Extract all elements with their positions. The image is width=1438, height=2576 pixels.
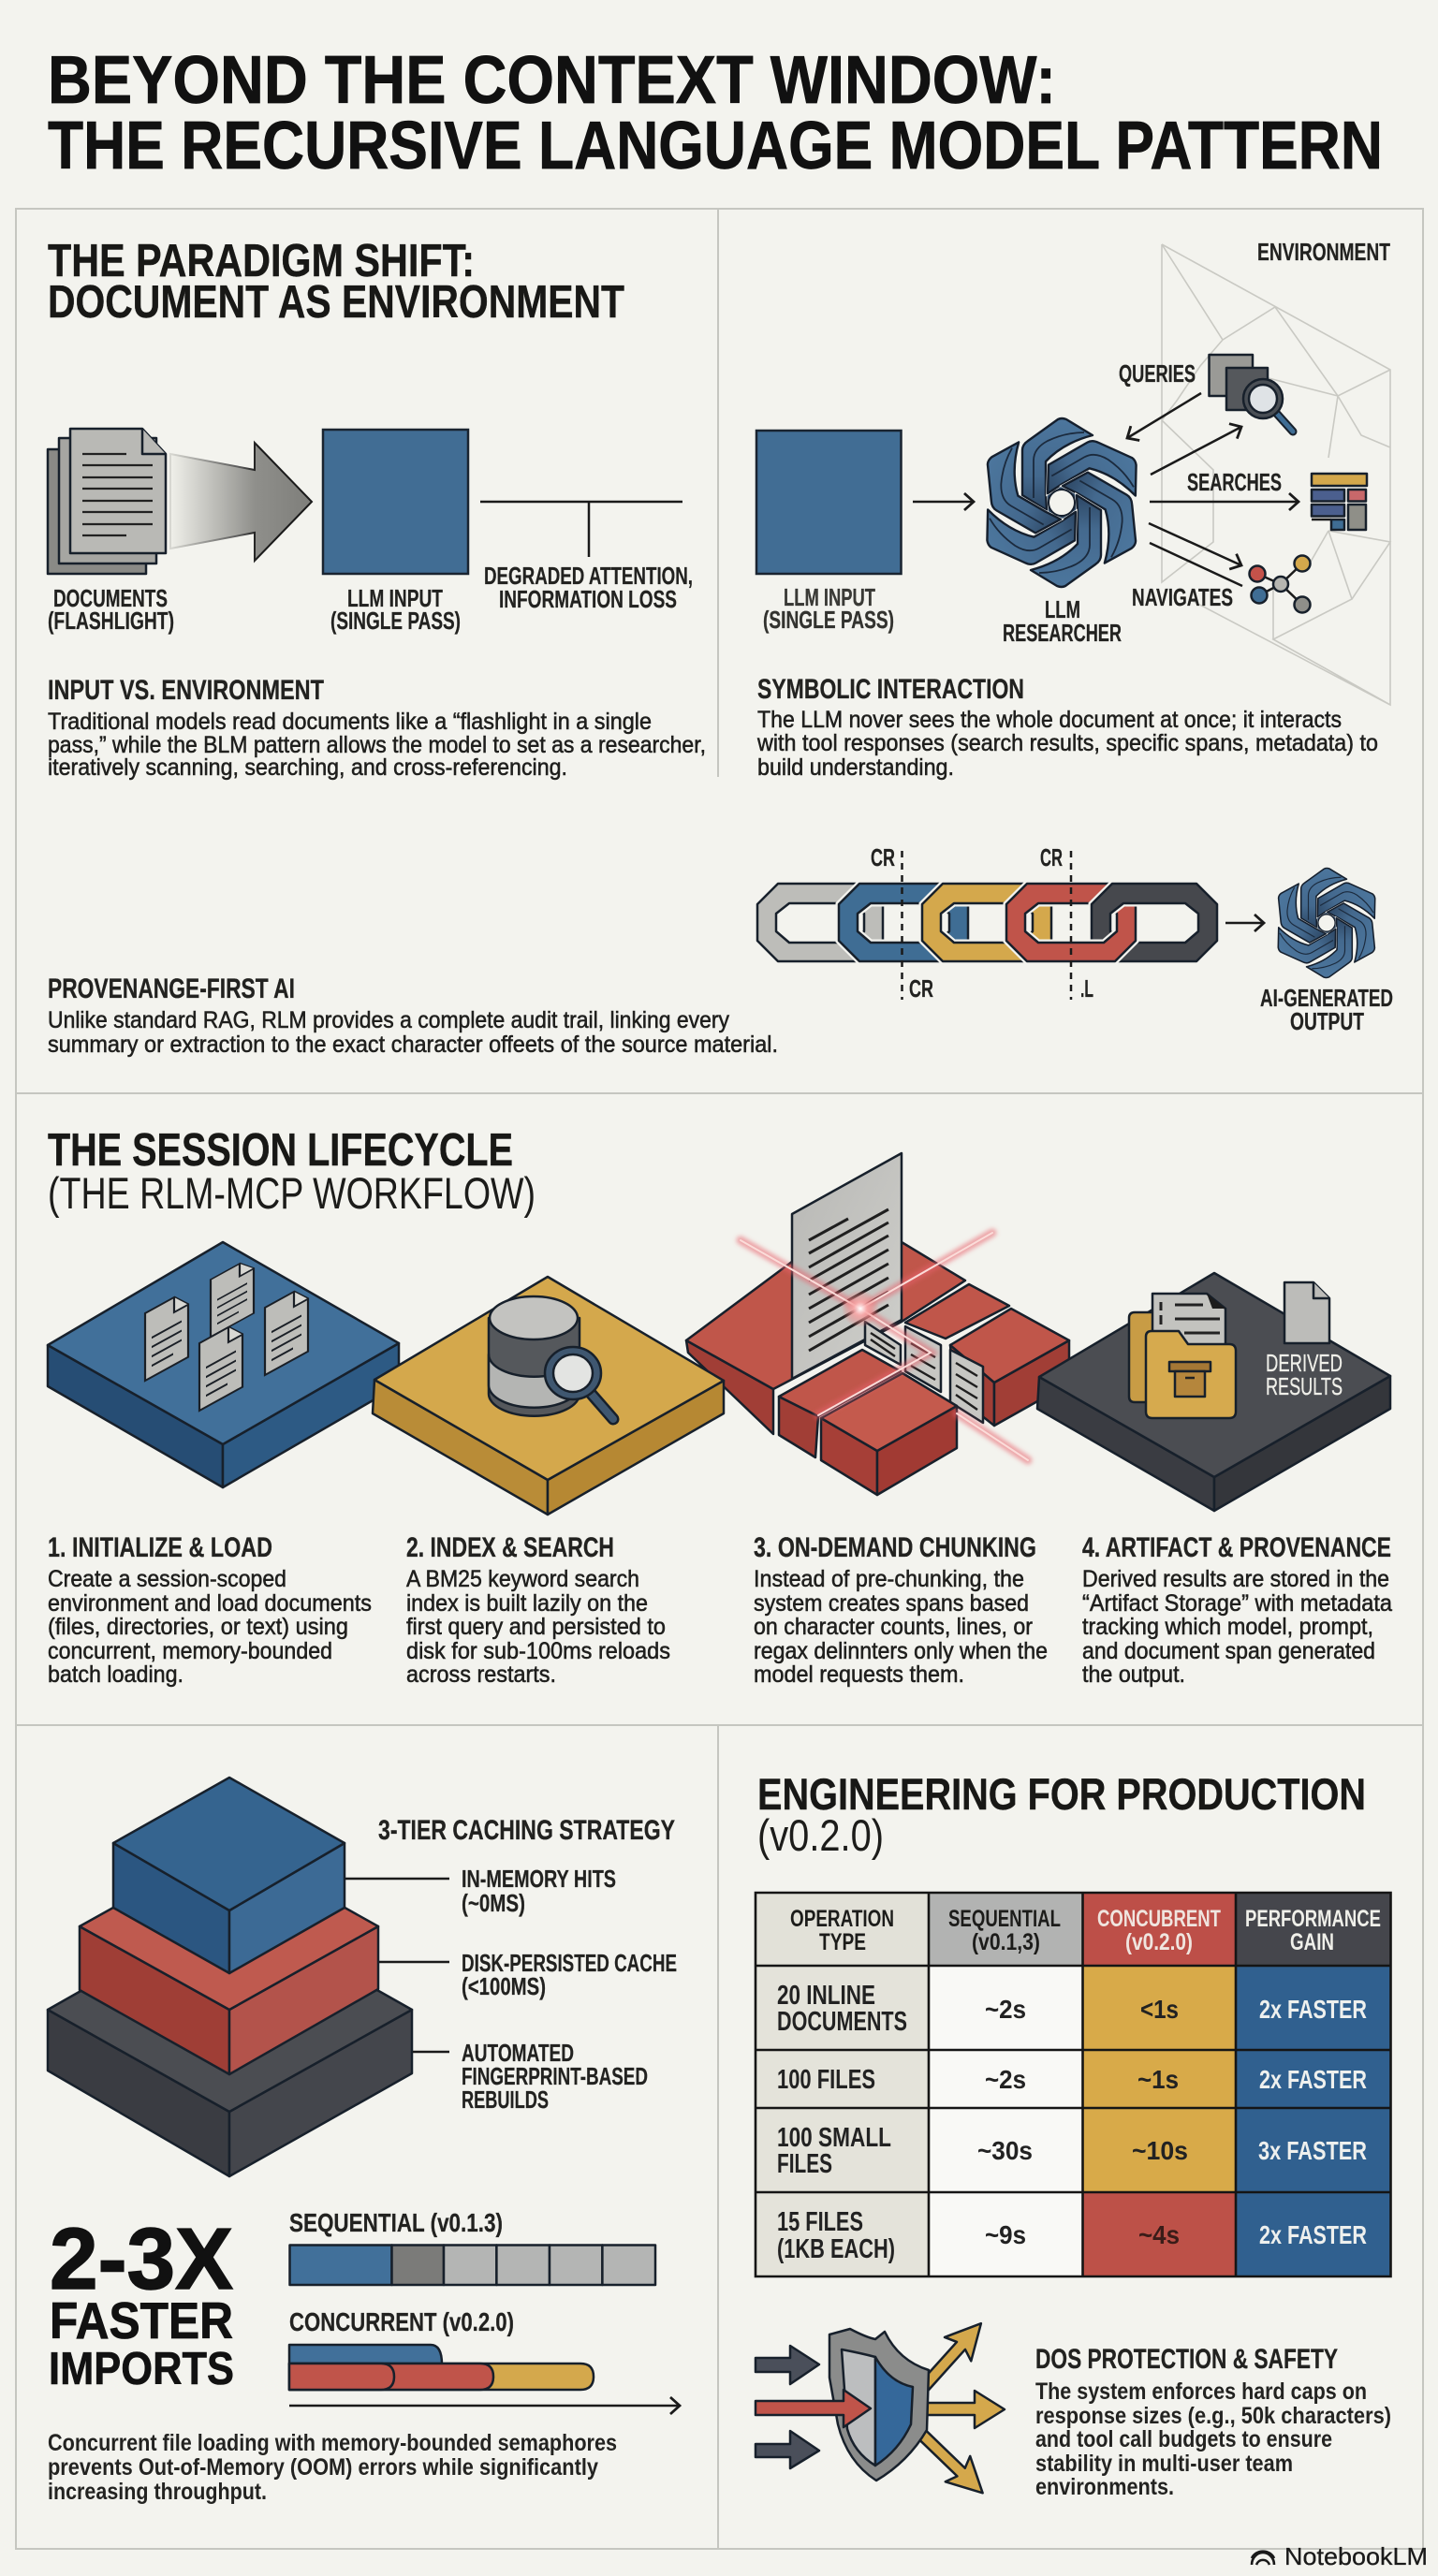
chart: 3-tier caching stack bbox=[48, 1778, 412, 2176]
table header: OPERATION bbox=[790, 1906, 894, 1932]
table row: 20 inline documents: DOCUMENTS bbox=[777, 2007, 907, 2037]
step 3 text: 3. ON-DEMAND CHUNKING bbox=[754, 1532, 1036, 1563]
block: middle bbox=[905, 1284, 1009, 1339]
text block: concurrent loading: Concurrent file loading with memory-bounded semaphores bbox=[48, 2430, 617, 2456]
arrow: flashlight beam bbox=[170, 443, 312, 561]
performance table bbox=[756, 1893, 1391, 2276]
text block: input vs environment: Traditional models read documents like a “flashlight in a single bbox=[48, 709, 652, 735]
icon: magnifier bbox=[545, 1347, 613, 1419]
step 2 text: index is built lazily on the bbox=[406, 1590, 648, 1617]
table row: 20 inline documents: ~2s bbox=[985, 1995, 1026, 2024]
platform 3: red chunks with document bbox=[686, 1153, 1069, 1495]
icon: LLM input block bbox=[323, 430, 468, 574]
panel: engineering for production bbox=[718, 1725, 1423, 2549]
arrows: deflected bbox=[907, 2311, 1005, 2506]
table row: 20 inline documents: 20 INLINE bbox=[777, 1981, 875, 2011]
arrow: blocked red bbox=[756, 2390, 871, 2427]
chart: concurrent bars bbox=[289, 2307, 594, 2390]
label: navigates: NAVIGATES bbox=[1132, 583, 1233, 611]
icon: search results table bbox=[1312, 474, 1367, 530]
text block: provenance-first AI: Unlike standard RAG, RLM provides a complete audit trail, linking every bbox=[48, 1007, 729, 1033]
step 2 text: first query and persisted to bbox=[406, 1614, 666, 1640]
arrow: chain to output bbox=[1225, 922, 1264, 924]
table row: 100 files: 100 FILES bbox=[777, 2065, 875, 2095]
text block: input vs environment bbox=[48, 675, 706, 781]
label: LLM input bbox=[330, 584, 461, 635]
label: documents: DOCUMENTS bbox=[53, 584, 168, 612]
table row: 100 small files: 100 SMALL bbox=[777, 2123, 891, 2153]
table row: 15 files: 2x FASTER bbox=[1259, 2220, 1367, 2249]
chart: sequential bar: SEQUENTIAL (v0.1.3) bbox=[289, 2208, 503, 2237]
table row: 20 inline documents: <1s bbox=[1140, 1995, 1179, 2024]
table row: 15 files: ~4s bbox=[1138, 2220, 1180, 2249]
callout: disk-persisted cache bbox=[379, 1949, 677, 2000]
text block: symbolic interaction bbox=[756, 674, 1378, 781]
step 4 text bbox=[1082, 1532, 1392, 1688]
callout: 2-3x faster imports bbox=[49, 2210, 234, 2394]
diagram: degraded attention line bbox=[480, 502, 682, 557]
step 1 text: concurrent, memory-bounded bbox=[48, 1638, 332, 1664]
label: environment: ENVIRONMENT bbox=[1257, 238, 1390, 266]
text block: input vs environment: INPUT VS. ENVIRONMENT bbox=[48, 675, 324, 706]
label: documents: (FLASHLIGHT) bbox=[48, 607, 174, 635]
text block: DoS protection: and tool call budgets to ensure bbox=[1035, 2426, 1332, 2452]
step 1 text: Create a session-scoped bbox=[48, 1566, 286, 1592]
table row: 20 inline documents bbox=[756, 1966, 1391, 2050]
block: front small bbox=[779, 1350, 901, 1457]
table row: 100 files: ~2s bbox=[985, 2065, 1026, 2094]
block: front large bbox=[821, 1373, 957, 1495]
text block: DoS protection: response sizes (e.g., 50k characters) bbox=[1035, 2403, 1391, 2429]
label: LLM researcher: LLM bbox=[1045, 595, 1080, 623]
heading: caching strategy: 3-TIER CACHING STRATEGY bbox=[378, 1815, 675, 1846]
table header bbox=[756, 1893, 1391, 1966]
table row: 100 small files: FILES bbox=[777, 2149, 832, 2179]
label: LLM researcher bbox=[1003, 595, 1122, 647]
callout: fingerprint rebuilds: FINGERPRINT-BASED bbox=[462, 2062, 648, 2090]
step 1 text: batch loading. bbox=[48, 1661, 183, 1688]
table row: 100 small files: ~10s bbox=[1132, 2136, 1188, 2165]
text block: symbolic interaction: The LLM nover sees the whole document at once; it interacts bbox=[757, 707, 1342, 733]
diagram: environment mesh bbox=[1162, 238, 1390, 705]
label: LLM input faded bbox=[763, 583, 894, 634]
text block: input vs environment: iteratively scanning, searching, and cross-referencing. bbox=[48, 754, 567, 781]
shield bbox=[829, 2329, 929, 2481]
table row: 100 small files: ~30s bbox=[977, 2136, 1033, 2165]
step 4 text: tracking which model, prompt, bbox=[1082, 1614, 1373, 1640]
label: chain markers: CR bbox=[871, 843, 895, 871]
step 2 text bbox=[406, 1532, 670, 1688]
heading: paradigm shift: DOCUMENT AS ENVIRONMENT bbox=[48, 277, 624, 328]
laser cut lines bbox=[741, 1233, 1028, 1460]
table row: 100 small files: 3x FASTER bbox=[1258, 2136, 1367, 2165]
icon: query documents and magnifier bbox=[1210, 355, 1293, 432]
label: derived results: RESULTS bbox=[1266, 1372, 1343, 1400]
label: degraded attention: DEGRADED ATTENTION, bbox=[484, 562, 693, 590]
platform 1: blue documents bbox=[48, 1242, 399, 1487]
table row: 15 files: (1KB EACH) bbox=[777, 2234, 895, 2264]
panel: session lifecycle bbox=[16, 1093, 1423, 1725]
table row: 15 files bbox=[756, 2192, 1391, 2276]
label: derived results: DERIVED bbox=[1266, 1349, 1343, 1377]
callout: fingerprint rebuilds: REBUILDS bbox=[462, 2086, 549, 2114]
icon: output knot bbox=[1267, 869, 1387, 977]
step 3 text bbox=[754, 1532, 1048, 1688]
label: derived results bbox=[1266, 1349, 1343, 1400]
label: queries: QUERIES bbox=[1119, 359, 1196, 388]
heading: engineering for production: (v0.2.0) bbox=[757, 1810, 884, 1860]
text block: DoS protection: DOS PROTECTION & SAFETY bbox=[1035, 2344, 1338, 2375]
heading: paradigm shift bbox=[48, 236, 624, 328]
title bbox=[48, 43, 1383, 183]
label: chain markers: .L bbox=[1080, 974, 1093, 1003]
arrow: time axis bbox=[289, 2405, 680, 2407]
heading: session lifecycle bbox=[48, 1125, 536, 1218]
table row: 15 files: 15 FILES bbox=[777, 2207, 863, 2237]
table header: TYPE bbox=[819, 1929, 866, 1955]
panel: caching and imports bbox=[16, 1725, 718, 2549]
text block: symbolic interaction: build understanding. bbox=[757, 754, 954, 781]
icon: shield with deflected arrows bbox=[756, 2311, 1005, 2506]
step 3 text: regax delinnters only when the bbox=[754, 1638, 1048, 1664]
step 2 text: across restarts. bbox=[406, 1661, 556, 1688]
text block: concurrent loading bbox=[48, 2430, 617, 2505]
icon: derived document bbox=[1284, 1282, 1329, 1343]
icon: LLM researcher knot bbox=[969, 418, 1154, 587]
table header: (v0.2.0) bbox=[1125, 1929, 1193, 1955]
table row: 20 inline documents: 2x FASTER bbox=[1259, 1995, 1367, 2024]
icon: folder with checklist bbox=[1129, 1294, 1236, 1418]
label: AI-generated output bbox=[1260, 984, 1393, 1035]
block: back left bbox=[686, 1242, 965, 1434]
platform 4: dark artifact storage bbox=[1037, 1273, 1390, 1511]
step 1 text: 1. INITIALIZE & LOAD bbox=[48, 1532, 272, 1563]
label: degraded attention: INFORMATION LOSS bbox=[499, 585, 677, 613]
label: LLM researcher: RESEARCHER bbox=[1003, 619, 1122, 647]
arrow: input to researcher bbox=[913, 501, 974, 503]
icon: node graph bbox=[1249, 556, 1311, 612]
label: LLM input: LLM INPUT bbox=[347, 584, 443, 612]
heading: session lifecycle: THE SESSION LIFECYCLE bbox=[48, 1125, 513, 1176]
text block: provenance-first AI: summary or extraction to the exact character offeets of the source material. bbox=[48, 1032, 778, 1058]
table header: PERFORMANCE bbox=[1245, 1906, 1381, 1932]
document slices bbox=[865, 1322, 983, 1423]
text block: concurrent loading: prevents Out-of-Memory (OOM) errors while significantly bbox=[48, 2454, 598, 2481]
tier: blue top bbox=[113, 1778, 345, 1973]
arrow: response bbox=[1151, 427, 1241, 475]
step 3 text: model requests them. bbox=[754, 1661, 964, 1688]
NotebookLM watermark: NotebookLM bbox=[1284, 2542, 1428, 2570]
step 1 text: (files, directories, or text) using bbox=[48, 1614, 348, 1640]
label: LLM input: (SINGLE PASS) bbox=[330, 607, 461, 635]
step 4 text: “Artifact Storage” with metadata bbox=[1082, 1590, 1392, 1617]
panel: the paradigm shift bbox=[16, 209, 1423, 1093]
callout: fingerprint rebuilds bbox=[413, 2039, 648, 2114]
document being sliced bbox=[792, 1153, 902, 1379]
step 2 text: A BM25 keyword search bbox=[406, 1566, 639, 1592]
table row: 15 files: ~9s bbox=[985, 2220, 1026, 2249]
callout: 2-3x faster imports: 2-3X bbox=[50, 2210, 233, 2307]
arrows: incoming bbox=[756, 2346, 819, 2468]
callout: in-memory hits bbox=[345, 1865, 616, 1917]
chart: sequential bar bbox=[289, 2208, 655, 2285]
callout: disk-persisted cache: DISK-PERSISTED CACHE bbox=[462, 1949, 677, 1977]
text block: input vs environment: pass,” while the BLM pattern allows the model to set as a researcher, bbox=[48, 732, 706, 758]
step 4 text: Derived results are stored in the bbox=[1082, 1566, 1389, 1592]
callout: 2-3x faster imports: FASTER bbox=[50, 2291, 233, 2349]
table row: 100 files bbox=[756, 2050, 1391, 2108]
text block: DoS protection bbox=[1035, 2344, 1391, 2500]
text block: symbolic interaction: SYMBOLIC INTERACTION bbox=[757, 674, 1024, 705]
table header: SEQUENTIAL bbox=[948, 1906, 1061, 1932]
step 3 text: system creates spans based bbox=[754, 1590, 1029, 1617]
label: LLM input faded: (SINGLE PASS) bbox=[763, 606, 894, 634]
icon: NotebookLM mark bbox=[1252, 2552, 1274, 2565]
callout: in-memory hits: (~0MS) bbox=[462, 1889, 525, 1917]
label: AI-generated output: OUTPUT bbox=[1290, 1007, 1364, 1035]
heading: engineering for production bbox=[757, 1769, 1366, 1860]
tier: dark base bbox=[48, 1907, 412, 2176]
arrow: navigates return bbox=[1150, 543, 1242, 586]
icon: database bbox=[489, 1296, 580, 1416]
title: BEYOND THE CONTEXT WINDOW: bbox=[48, 43, 1056, 118]
arrow: searches bbox=[1150, 501, 1299, 503]
step 3 text: Instead of pre-chunking, the bbox=[754, 1566, 1024, 1592]
callout: in-memory hits: IN-MEMORY HITS bbox=[462, 1865, 616, 1893]
heading: session lifecycle: (THE RLM-MCP WORKFLOW) bbox=[48, 1168, 536, 1218]
text block: DoS protection: The system enforces hard caps on bbox=[1035, 2378, 1367, 2405]
label: chain markers: CR bbox=[1040, 843, 1063, 871]
icon: document stack bbox=[48, 429, 166, 574]
chain diagram bbox=[757, 843, 1217, 1003]
step 1 text: environment and load documents bbox=[48, 1590, 372, 1617]
callout: disk-persisted cache: (<100MS) bbox=[462, 1972, 546, 2000]
label: LLM input faded: LLM INPUT bbox=[784, 583, 875, 611]
step 3 text: on character counts, lines, or bbox=[754, 1614, 1033, 1640]
text block: DoS protection: environments. bbox=[1035, 2474, 1174, 2500]
arrow: navigates bbox=[1149, 523, 1241, 565]
label: chain markers: CR bbox=[909, 974, 933, 1003]
text block: concurrent loading: increasing throughput. bbox=[48, 2479, 267, 2505]
text block: DoS protection: stability in multi-user team bbox=[1035, 2451, 1293, 2477]
table row: 100 files: 2x FASTER bbox=[1259, 2065, 1367, 2094]
table header: CONCUBRENT bbox=[1097, 1906, 1221, 1932]
tier: red middle bbox=[80, 1843, 378, 2074]
text block: symbolic interaction: with tool responses (search results, specific spans, metadata) to bbox=[756, 730, 1378, 756]
arrow: queries bbox=[1127, 393, 1201, 438]
step 2 text: disk for sub-100ms reloads bbox=[406, 1638, 670, 1664]
table row: 100 files: ~1s bbox=[1137, 2065, 1179, 2094]
label: searches: SEARCHES bbox=[1187, 468, 1282, 496]
label: chain markers bbox=[871, 843, 1093, 1003]
table row: 100 small files bbox=[756, 2108, 1391, 2192]
block: right bbox=[950, 1309, 1069, 1426]
step 4 text: the output. bbox=[1082, 1661, 1185, 1688]
text block: provenance-first AI bbox=[48, 973, 778, 1058]
chart: concurrent bars: CONCURRENT (v0.2.0) bbox=[289, 2307, 514, 2336]
label: degraded attention bbox=[484, 562, 693, 613]
icon: documents on platform bbox=[145, 1256, 308, 1411]
heading: paradigm shift: THE PARADIGM SHIFT: bbox=[48, 236, 475, 286]
step 2 text: 2. INDEX & SEARCH bbox=[406, 1532, 614, 1563]
callout: fingerprint rebuilds: AUTOMATED bbox=[462, 2039, 574, 2067]
callout: 2-3x faster imports: IMPORTS bbox=[49, 2344, 234, 2394]
step 4 text: and document span generated bbox=[1082, 1638, 1375, 1664]
step 1 text bbox=[48, 1532, 372, 1688]
platform 2: gold index bbox=[373, 1277, 724, 1515]
table header: (v0.1,3) bbox=[972, 1929, 1040, 1955]
icon: LLM input block 2 bbox=[756, 431, 901, 574]
text block: provenance-first AI: PROVENANGE-FIRST AI bbox=[48, 973, 295, 1004]
table header: GAIN bbox=[1290, 1929, 1334, 1955]
label: documents bbox=[48, 584, 174, 635]
